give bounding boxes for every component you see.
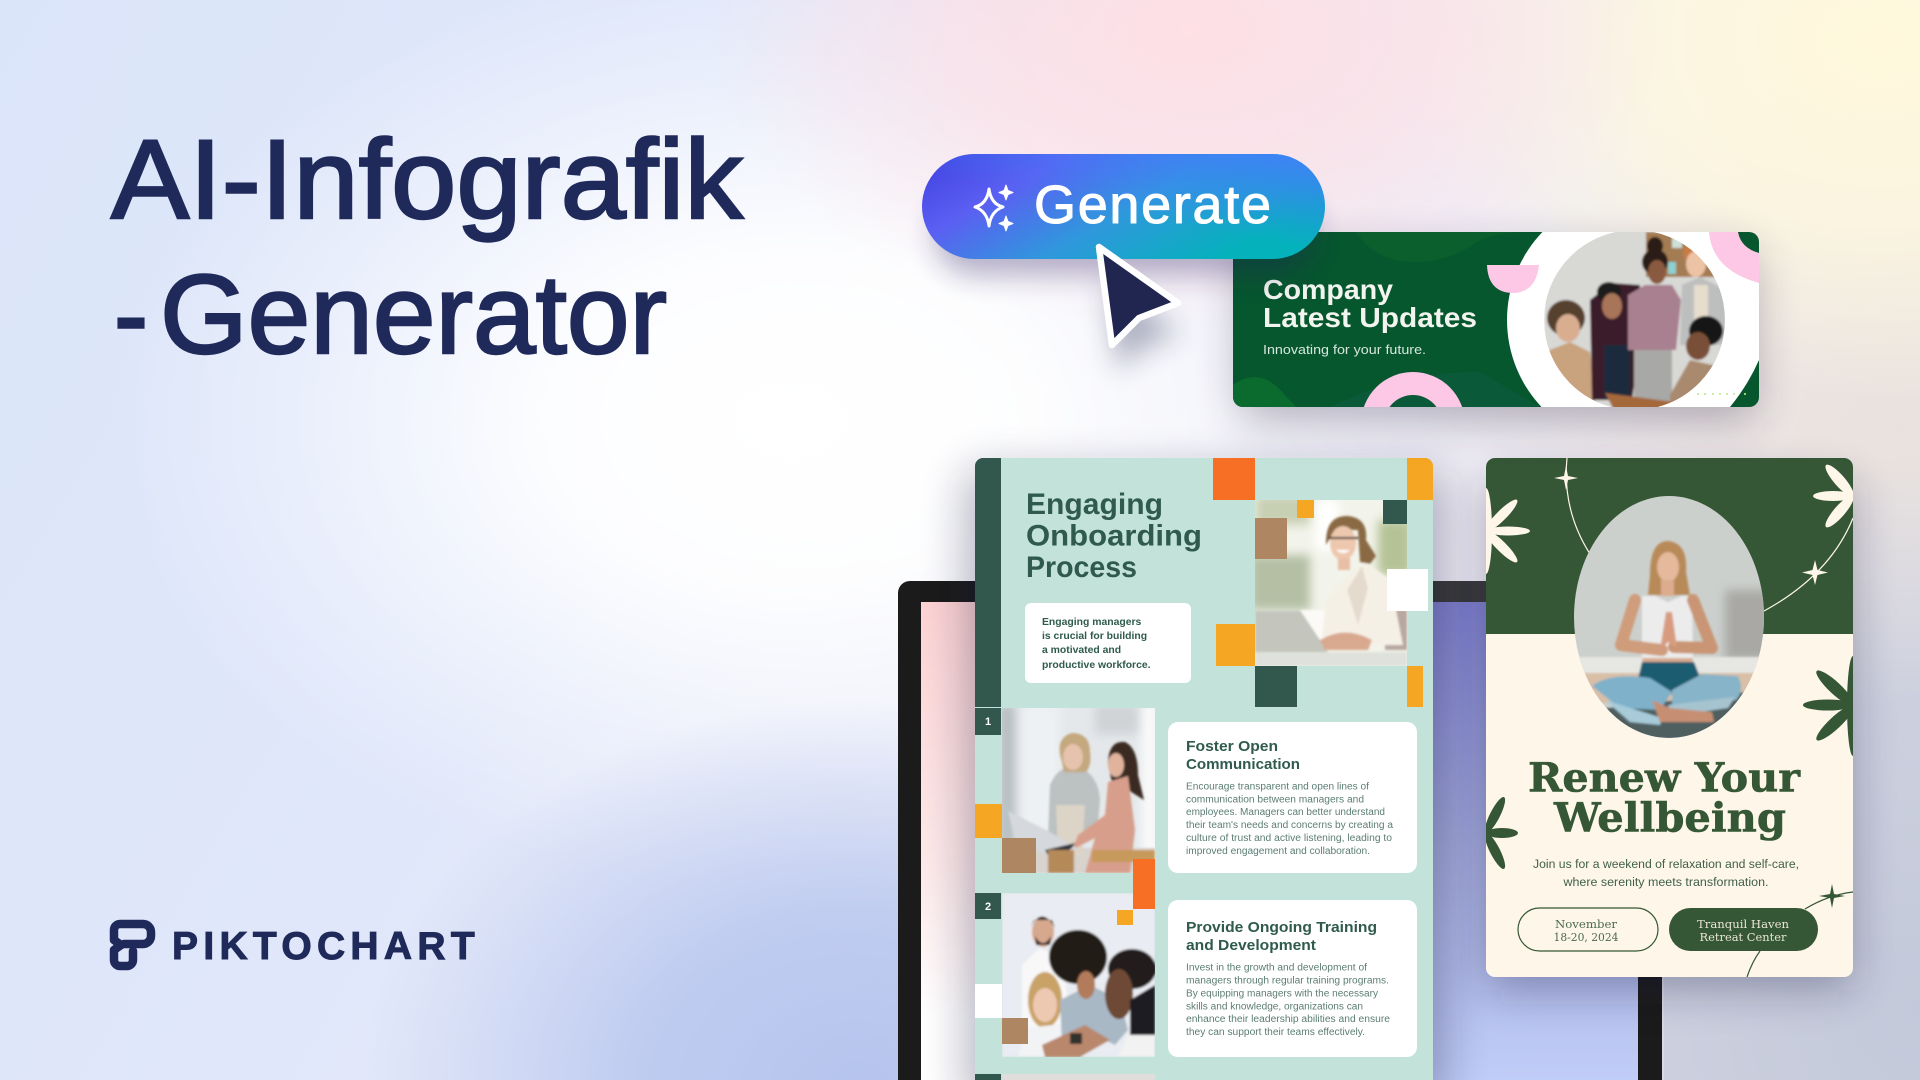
flower: right dark xyxy=(1803,656,1853,756)
heading: Provide Ongoing Training and Development: and Development xyxy=(1186,937,1316,954)
green dots xyxy=(1697,393,1746,395)
body text: employees. Managers can better understand xyxy=(1186,807,1385,818)
step 2 accents xyxy=(975,859,1155,1044)
step 2 number xyxy=(975,893,1001,919)
pill: venue: Tranquil Haven xyxy=(1697,918,1789,931)
heading: Foster Open Communication: Communication xyxy=(1186,756,1300,773)
flower: top right xyxy=(1813,464,1853,528)
heading: Engaging Onboarding Process xyxy=(1027,492,1200,578)
title xyxy=(111,117,744,377)
paragraph xyxy=(1533,857,1799,889)
step 1 card xyxy=(1168,722,1417,873)
pill: venue xyxy=(1669,908,1818,951)
intro text box: a motivated and xyxy=(1042,645,1121,656)
body text: culture of trust and active listening, leading to xyxy=(1186,833,1393,844)
heading: Engaging Onboarding Process: Process xyxy=(1026,551,1137,584)
shadow: banner xyxy=(1240,250,1755,420)
icon: star xyxy=(1554,466,1578,490)
intro text box: Engaging managers xyxy=(1042,617,1142,628)
heading: Engaging Onboarding Process: Onboarding xyxy=(1026,520,1202,552)
icon: Piktochart mark xyxy=(114,924,151,966)
decorative arcs and stars xyxy=(1566,458,1853,611)
panel: onboarding infographic xyxy=(975,458,1433,1080)
flower: left xyxy=(1486,488,1530,574)
title: AI-Infografik xyxy=(111,117,744,242)
decorative blocks: header mosaic xyxy=(1213,458,1433,707)
intro text box: is crucial for building xyxy=(1042,631,1147,642)
step 2 number: 2 xyxy=(985,901,991,913)
shadow: cursor xyxy=(1105,280,1180,372)
body text: improved engagement and collaboration. xyxy=(1186,846,1370,857)
shadow: infographic card xyxy=(965,470,1445,1080)
shadow: generate button xyxy=(935,190,1315,275)
step 2 card xyxy=(1168,900,1417,1057)
photo: team around laptop xyxy=(1002,893,1156,1057)
body text xyxy=(1186,963,1391,1038)
body text: By equipping managers with the necessary xyxy=(1186,988,1378,999)
button label: Generate xyxy=(1034,175,1271,235)
body text: communication between managers and xyxy=(1186,794,1364,805)
pill: date xyxy=(1518,908,1658,951)
intro text box xyxy=(1025,603,1191,683)
button: Generate xyxy=(922,154,1325,259)
panel: company updates banner xyxy=(1233,232,1759,407)
monitor xyxy=(898,581,1664,1080)
title: Generator xyxy=(160,252,667,377)
heading: Renew Your Wellbeing: Renew Your xyxy=(1528,754,1801,802)
step 1 accents xyxy=(975,804,1036,873)
photo: team of five colleagues xyxy=(1544,230,1726,412)
pill: date: 18-20, 2024 xyxy=(1554,931,1618,944)
photo: smiling woman at laptop xyxy=(1250,495,1412,666)
heading: Provide Ongoing Training and Development xyxy=(1186,919,1377,954)
body text xyxy=(1186,782,1394,857)
side strip xyxy=(975,458,1001,707)
icon: sparkles xyxy=(975,185,1013,231)
flower: lower left dark xyxy=(1486,797,1518,869)
shadow: retreat flyer xyxy=(1486,480,1853,990)
background waves xyxy=(1233,372,1540,407)
heading: Provide Ongoing Training and Development: Provide Ongoing Training xyxy=(1186,919,1377,936)
wordmark: PIKTOCHART xyxy=(172,925,480,968)
icon: cursor arrow xyxy=(1099,247,1178,345)
intro text box: productive workforce. xyxy=(1042,660,1151,671)
body text: Invest in the growth and development of xyxy=(1186,963,1367,974)
body text: their team's needs and concerns by creating a xyxy=(1186,820,1394,831)
body text: skills and knowledge, organizations can xyxy=(1186,1001,1363,1012)
banner subtitle: Innovating for your future. xyxy=(1263,342,1426,357)
paragraph: where serenity meets transformation. xyxy=(1562,875,1768,889)
body text: managers through regular training programs. xyxy=(1186,976,1389,986)
logo: Piktochart xyxy=(114,924,480,968)
step 1 number: 1 xyxy=(985,716,991,728)
pill: venue: Retreat Center xyxy=(1700,931,1787,944)
photo: two women with laptop xyxy=(998,704,1157,879)
panel: wellbeing retreat flyer xyxy=(1480,458,1859,977)
heading: Foster Open Communication: Foster Open xyxy=(1186,738,1278,755)
step 1 number xyxy=(975,708,1001,735)
decorative lines: lower right xyxy=(1747,892,1853,977)
photo: woman meditating xyxy=(1574,496,1770,739)
banner heading xyxy=(1263,274,1477,333)
heading: Engaging Onboarding Process: Engaging xyxy=(1026,488,1163,521)
pill: date: November xyxy=(1555,918,1618,931)
pink accents xyxy=(1364,232,1759,407)
title: - xyxy=(114,252,148,377)
heading: Renew Your Wellbeing: Wellbeing xyxy=(1553,794,1786,842)
heading: Foster Open Communication xyxy=(1186,741,1300,769)
body text: they can support their teams effectively. xyxy=(1186,1027,1365,1038)
body text: Encourage transparent and open lines of xyxy=(1186,782,1369,792)
icon: star xyxy=(1802,560,1828,585)
white circle xyxy=(1507,232,1616,407)
banner heading: Company xyxy=(1263,274,1393,305)
banner heading: Latest Updates xyxy=(1263,302,1477,333)
paragraph: Join us for a weekend of relaxation and self-care, xyxy=(1533,857,1799,871)
step 3 start xyxy=(975,1074,1155,1080)
heading: Renew Your Wellbeing xyxy=(1528,754,1801,842)
icon: star xyxy=(1819,884,1845,908)
body text: enhance their leadership abilities and ensure xyxy=(1186,1014,1391,1025)
